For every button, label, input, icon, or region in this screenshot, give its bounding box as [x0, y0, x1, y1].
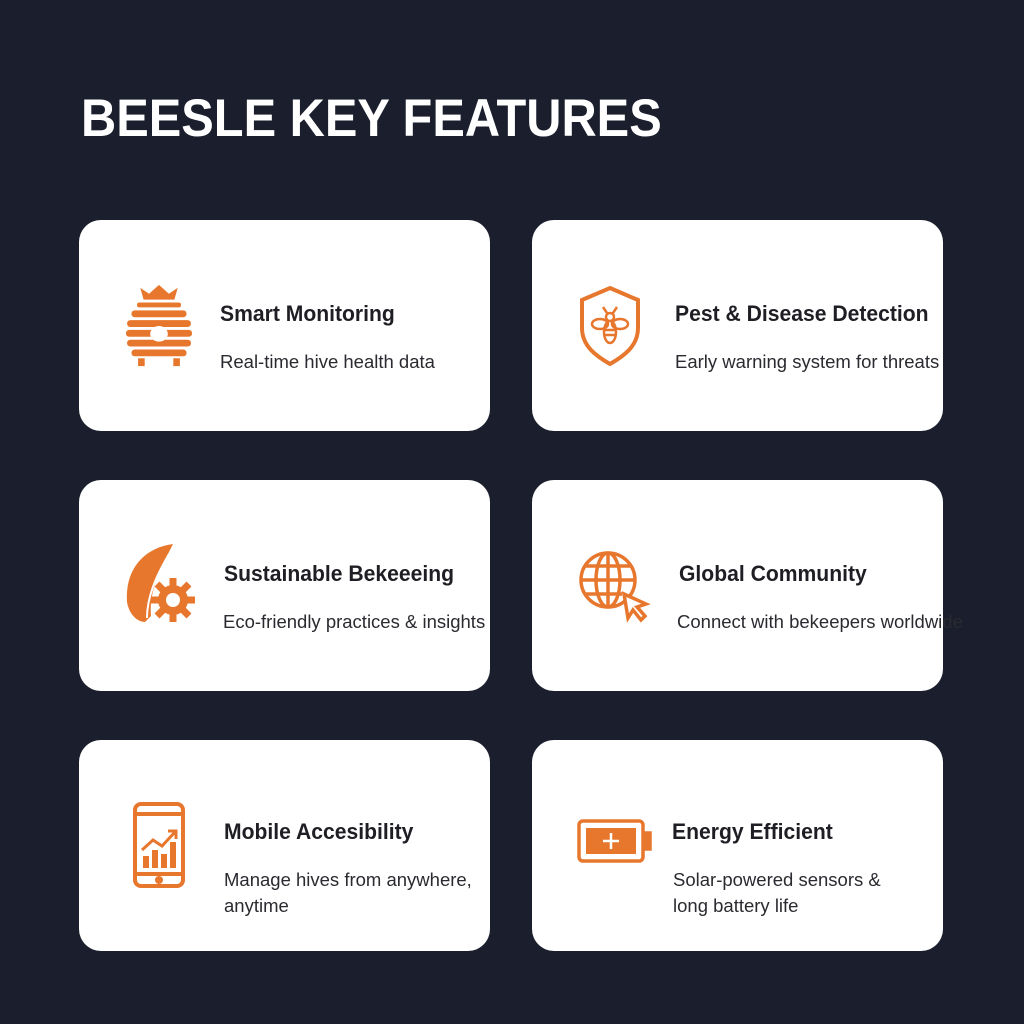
heading: Mobile Accesibility	[224, 819, 413, 844]
panel: pest detection	[532, 220, 943, 431]
heading: Energy Efficient	[672, 819, 833, 844]
icon: beehive	[126, 285, 192, 366]
text: Solar-powered sensors &	[673, 869, 881, 890]
icon: shield bee	[580, 286, 640, 366]
panel: sustainable	[79, 480, 490, 691]
panel: energy	[532, 740, 943, 951]
panel: community	[532, 480, 943, 691]
panel: smart monitoring	[79, 220, 490, 431]
heading: Smart Monitoring	[220, 301, 395, 326]
text: Connect with bekeepers worldwide	[677, 611, 963, 632]
text: Eco-friendly practices & insights	[223, 611, 485, 632]
text: Real-time hive health data	[220, 351, 435, 372]
text: Early warning system for threats	[675, 351, 939, 372]
panel: mobile	[79, 740, 490, 951]
text: long battery life	[673, 895, 798, 916]
text: anytime	[224, 895, 289, 916]
icon: leaf gear	[126, 544, 195, 622]
text: Manage hives from anywhere,	[224, 869, 472, 890]
heading: Sustainable Bekeeeing	[224, 561, 454, 586]
heading: Pest & Disease Detection	[675, 301, 929, 326]
icon: phone chart	[133, 802, 185, 888]
title: BEESLE KEY FEATURES	[81, 89, 662, 148]
heading: Global Community	[679, 561, 867, 586]
icon: globe cursor	[579, 551, 651, 623]
text	[224, 869, 472, 916]
text	[673, 869, 881, 916]
icon: battery	[577, 819, 652, 863]
